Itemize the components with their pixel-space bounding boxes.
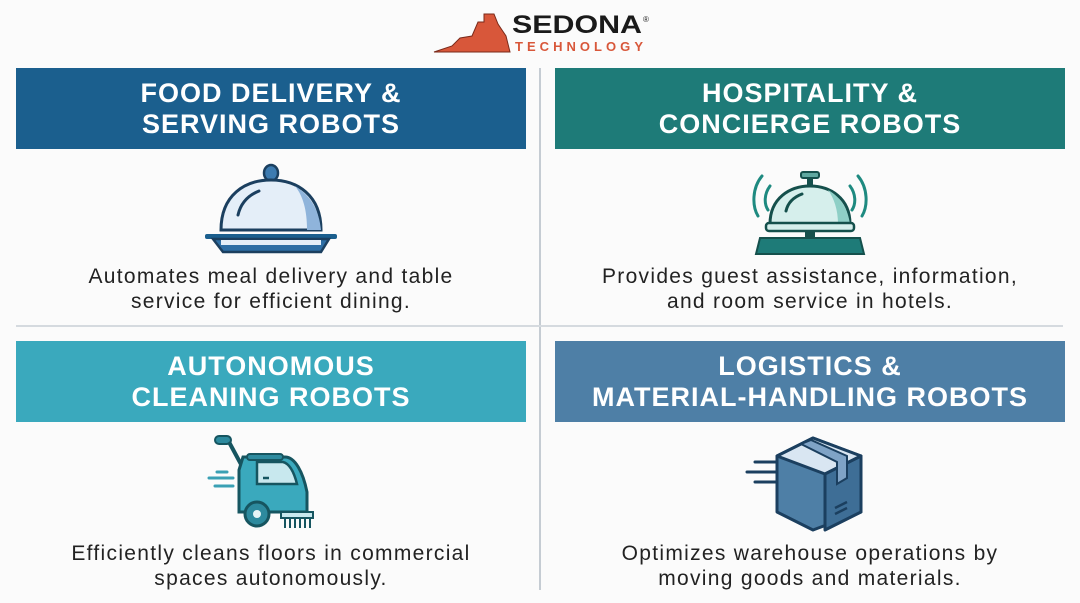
text: hospitality: Provides guest assistance, information, — [602, 265, 1018, 288]
panel: hospitality — [555, 68, 1065, 149]
panel: hospitality: CONCIERGE ROBOTS — [659, 108, 961, 138]
text: food delivery — [88, 265, 454, 313]
dividers — [539, 68, 541, 590]
text: food delivery: Automates meal delivery and table — [88, 265, 454, 288]
text: cleaning: Efficiently cleans floors in commercial — [71, 542, 471, 565]
text: logistics: moving goods and materials. — [658, 567, 962, 590]
panel: cleaning: AUTONOMOUS — [167, 350, 375, 380]
panel: cleaning — [16, 341, 526, 422]
panel: logistics: LOGISTICS & — [718, 350, 902, 380]
text: hospitality: and room service in hotels. — [667, 290, 953, 313]
logo: TECHNOLOGY — [515, 39, 643, 54]
panel: cleaning: CLEANING ROBOTS — [131, 382, 410, 412]
panel: food delivery — [16, 68, 526, 149]
panel: food delivery: FOOD DELIVERY & — [140, 78, 402, 108]
logo: ® — [643, 15, 649, 24]
logo: SEDONA — [512, 11, 642, 39]
text: hospitality — [602, 265, 1018, 313]
text: logistics: Optimizes warehouse operations by — [622, 542, 998, 565]
text: cleaning: spaces autonomously. — [154, 567, 388, 590]
icon: box — [746, 436, 862, 532]
text: cleaning — [71, 542, 471, 590]
text: logistics — [622, 542, 998, 590]
icon: cloche — [205, 164, 337, 254]
panel: hospitality: HOSPITALITY & — [702, 78, 918, 108]
panel: food delivery: SERVING ROBOTS — [142, 108, 400, 138]
panel: logistics: MATERIAL-HANDLING ROBOTS — [592, 382, 1028, 412]
icon: floor cleaner — [208, 435, 314, 528]
logo — [434, 11, 649, 54]
panel: logistics — [555, 341, 1065, 422]
icon: bell — [752, 171, 868, 255]
text: food delivery: service for efficient dining. — [131, 290, 411, 313]
